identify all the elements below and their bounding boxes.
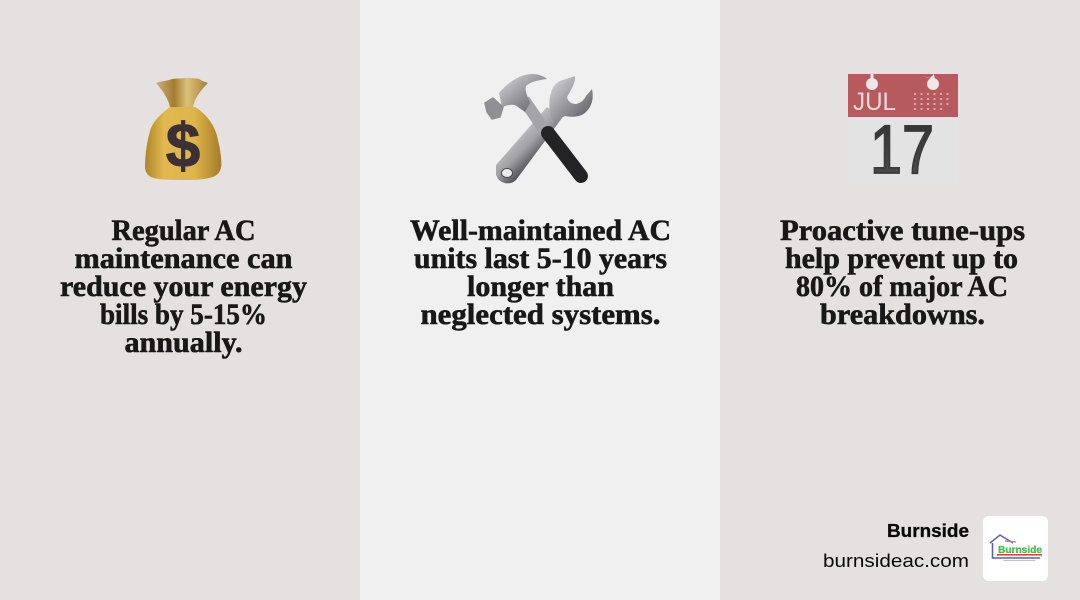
heading: lifespan statement: neglected systems. xyxy=(420,298,660,331)
icon: calendar xyxy=(848,74,958,188)
icon: money bag xyxy=(145,78,221,181)
panel: lifespan xyxy=(360,0,720,600)
icon: hammer and wrench xyxy=(485,74,593,183)
brand name: Burnside xyxy=(887,521,969,541)
logo: Burnside xyxy=(998,545,1042,556)
heading: energy savings statement: bills by 5-15% xyxy=(100,298,267,331)
icon: money bag: $ xyxy=(166,112,200,181)
heading: lifespan statement: units last 5-10 years xyxy=(414,242,667,275)
heading: breakdown statement xyxy=(780,214,1025,331)
icon: calendar: 17 xyxy=(870,111,934,188)
heading: energy savings statement: reduce your energy xyxy=(60,270,307,303)
heading: lifespan statement xyxy=(410,214,671,331)
heading: breakdown statement: Proactive tune-ups xyxy=(780,214,1025,247)
heading: breakdown statement: 80% of major AC xyxy=(796,270,1008,303)
heading: breakdown statement: breakdowns. xyxy=(820,298,985,331)
heading: breakdown statement: help prevent up to xyxy=(785,242,1018,275)
heading: energy savings statement: Regular AC xyxy=(112,214,256,247)
heading: lifespan statement: longer than xyxy=(467,270,614,303)
website: burnsideac.com xyxy=(823,551,969,571)
panel: energy savings xyxy=(0,0,360,600)
logo xyxy=(983,516,1048,581)
icon: calendar: JUL xyxy=(853,88,896,116)
heading: energy savings statement: maintenance can xyxy=(74,242,293,275)
heading: lifespan statement: Well-maintained AC xyxy=(410,214,671,247)
heading: energy savings statement: annually. xyxy=(124,326,242,359)
panel: breakdown prevention xyxy=(720,0,1080,600)
heading: energy savings statement xyxy=(60,214,307,359)
